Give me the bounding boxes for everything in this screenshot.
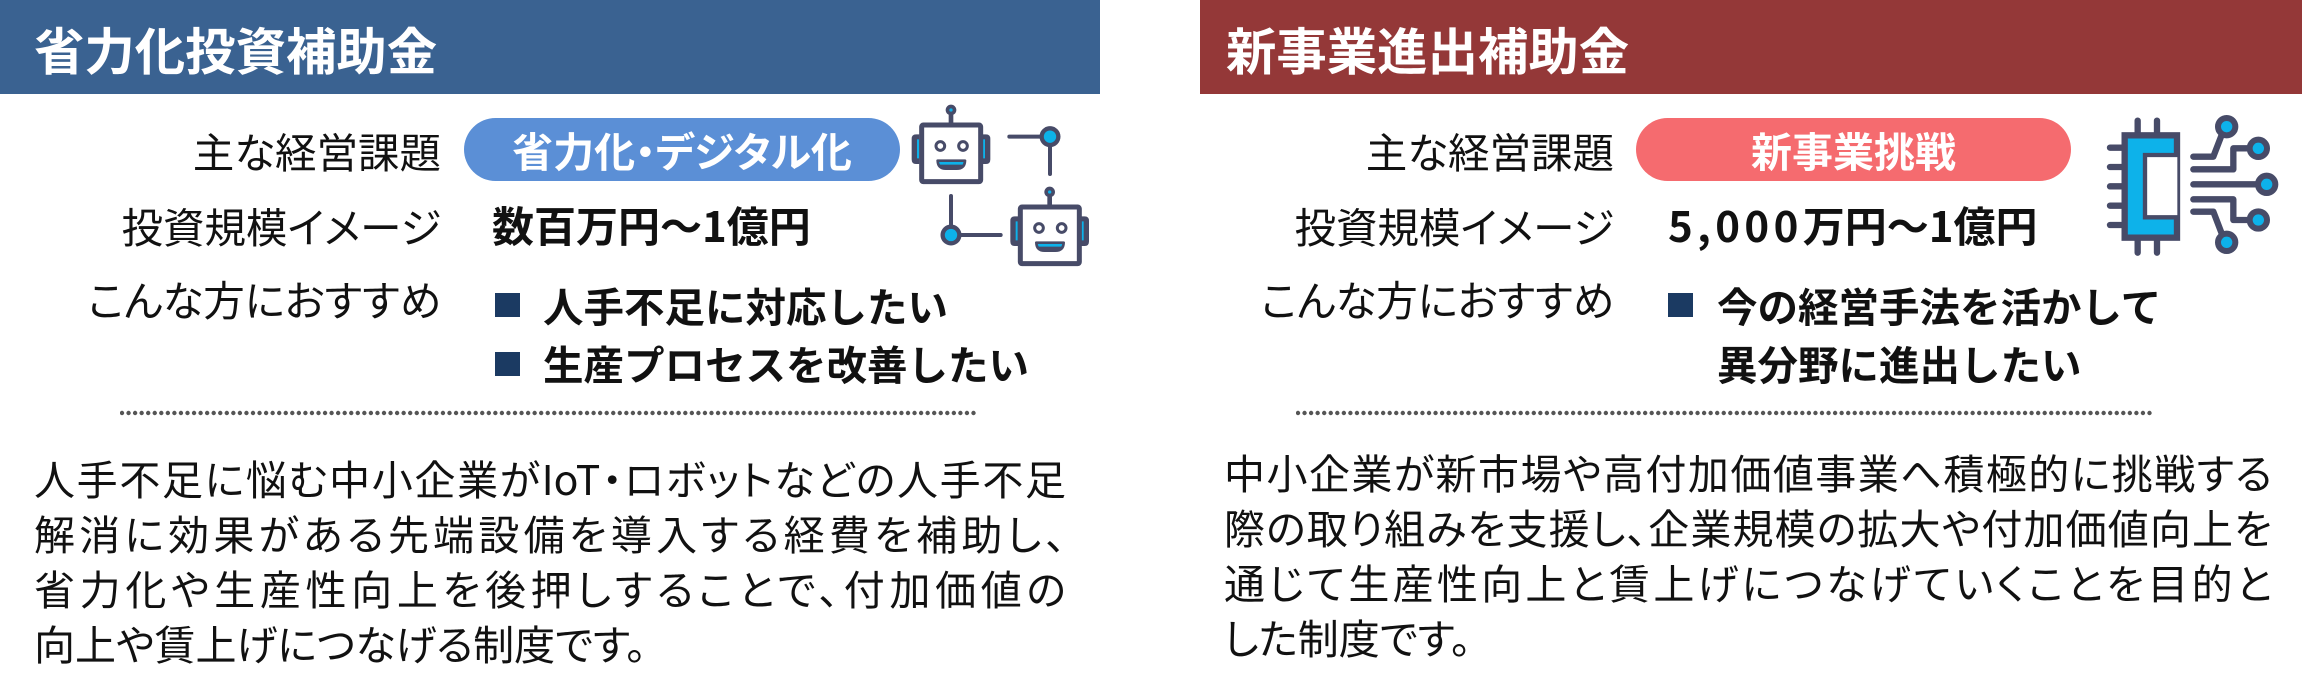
bullet marker 1 xyxy=(495,293,520,317)
label: こんな方におすすめ: こんな方におすすめ xyxy=(1261,268,1614,328)
description text xyxy=(34,447,1066,672)
value: investment scale: 5,000万円～1億円 xyxy=(1668,194,2038,255)
description text: した制度です。 xyxy=(1224,606,1471,666)
header bar xyxy=(0,0,1100,94)
description text: 通じて生産性向上と賃上げにつなげていくことを目的と xyxy=(1224,551,2272,611)
label: こんな方におすすめ: こんな方におすすめ xyxy=(88,268,441,328)
bullet marker xyxy=(1668,293,1693,317)
label: 投資規模イメージ: 投資規模イメージ xyxy=(122,195,441,255)
bullet marker 2 xyxy=(495,352,520,376)
panel: 新事業進出補助金 xyxy=(1200,0,2302,666)
pill: 省力化・デジタル化: 省力化・デジタル化 xyxy=(512,119,852,179)
heading: 新事業進出補助金 xyxy=(1226,12,1629,85)
icon: robots network xyxy=(912,104,1089,266)
description text: 解消に効果がある先端設備を導入する経費を補助し、 xyxy=(34,502,1066,562)
bullet text: 今の経営手法を活かして xyxy=(1717,275,2161,334)
value: investment scale: 数百万円～1億円 xyxy=(492,194,811,255)
label: 主な経営課題: 主な経営課題 xyxy=(193,120,441,180)
pill: 新事業挑戦 xyxy=(1636,118,2071,181)
bullet text 1: 人手不足に対応したい xyxy=(543,275,948,334)
label: 投資規模イメージ: 投資規模イメージ xyxy=(1295,195,1614,255)
icon: circuit chip xyxy=(2106,115,2278,256)
label: 主な経営課題: 主な経営課題 xyxy=(1366,120,1614,180)
dotted divider xyxy=(120,410,976,416)
description text xyxy=(1224,441,2272,666)
bullet text 2: 生産プロセスを改善したい xyxy=(543,333,1029,392)
header bar xyxy=(1200,0,2302,94)
bullet text continuation: 異分野に進出したい xyxy=(1717,333,2082,392)
description text: 中小企業が新市場や高付加価値事業へ積極的に挑戦する xyxy=(1224,441,2272,501)
description text: 際の取り組みを支援し、企業規模の拡大や付加価値向上を xyxy=(1224,496,2272,556)
heading: 省力化投資補助金 xyxy=(34,12,437,85)
description text: 省力化や生産性向上を後押しすることで、付加価値の xyxy=(34,557,1066,617)
pill: 新事業挑戦: 新事業挑戦 xyxy=(1751,119,1956,179)
description text: 向上や賃上げにつなげる制度です。 xyxy=(34,612,646,672)
description text: 人手不足に悩む中小企業がIoT・ロボットなどの人手不足 xyxy=(34,447,1066,507)
dotted divider xyxy=(1296,410,2152,416)
panel: 省力化投資補助金 xyxy=(0,0,1100,672)
